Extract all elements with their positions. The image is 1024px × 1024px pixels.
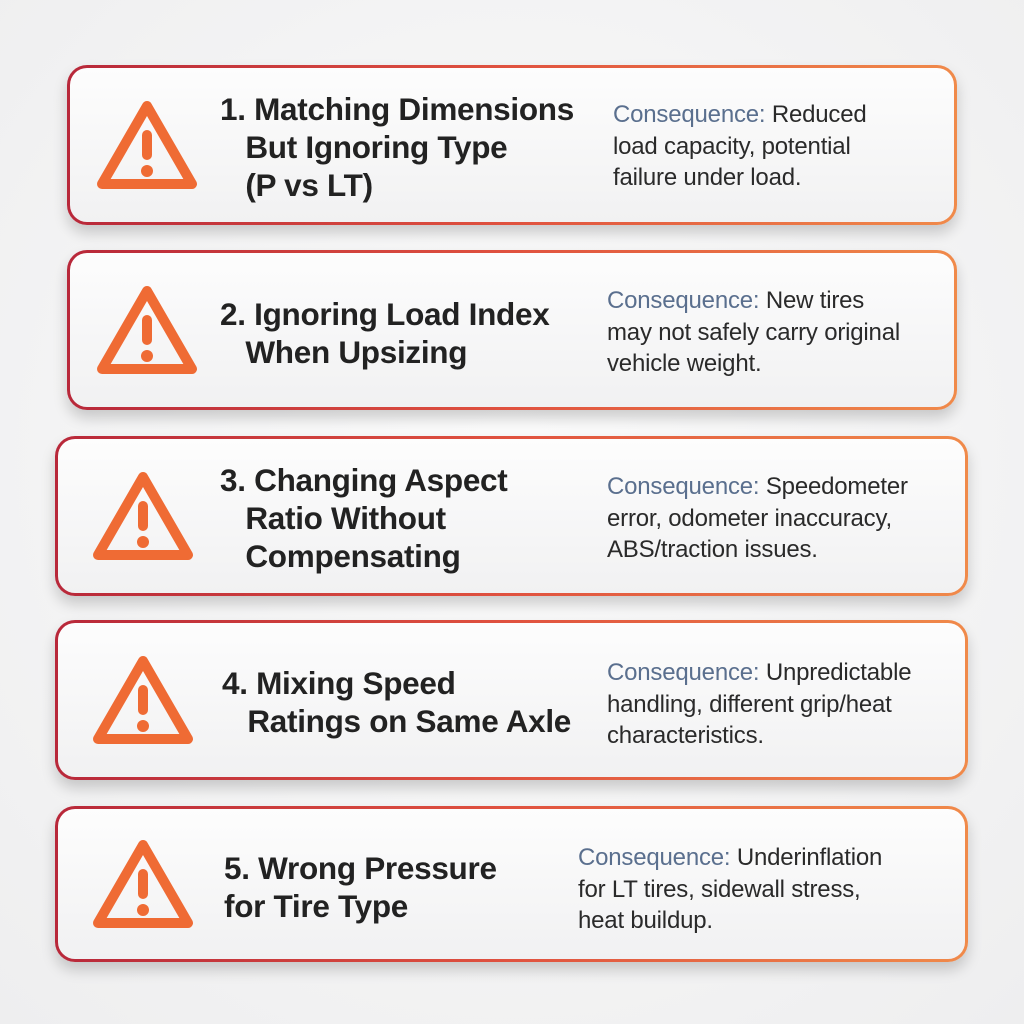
consequence [607, 659, 911, 749]
icon: warning [97, 101, 197, 189]
title: When Upsizing [245, 334, 467, 370]
consequence: characteristics. [607, 722, 764, 749]
consequence [607, 473, 908, 563]
title: 3. Changing Aspect [220, 462, 507, 498]
title [220, 296, 550, 370]
consequence: Consequence: Speedometer [607, 473, 908, 500]
title: 5. Wrong Pressure [224, 850, 497, 886]
card 5 [55, 806, 968, 962]
title: for Tire Type [224, 888, 408, 924]
title: 1. Matching Dimensions [220, 91, 574, 127]
consequence: vehicle weight. [607, 350, 761, 377]
consequence: may not safely carry original [607, 318, 900, 346]
consequence: load capacity, potential [613, 132, 851, 160]
icon: warning [93, 840, 193, 928]
consequence: Consequence: Unpredictable [607, 659, 911, 686]
consequence: handling, different grip/heat [607, 690, 892, 718]
title: (P vs LT) [245, 167, 373, 203]
icon: warning [97, 286, 197, 374]
consequence: ABS/traction issues. [607, 536, 818, 563]
card 3 [55, 436, 968, 596]
consequence [607, 287, 900, 377]
consequence: failure under load. [613, 164, 801, 191]
title: Compensating [245, 538, 461, 574]
title: Ratings on Same Axle [247, 703, 571, 739]
icon: warning [93, 656, 193, 744]
title [224, 850, 497, 924]
card 1 [67, 65, 957, 225]
title [220, 462, 508, 574]
title [220, 91, 574, 203]
title [222, 665, 571, 739]
consequence: Consequence: Reduced [613, 101, 867, 128]
title: But Ignoring Type [245, 129, 507, 165]
card 4 [55, 620, 968, 780]
consequence: error, odometer inaccuracy, [607, 504, 892, 532]
consequence: heat buildup. [578, 907, 713, 934]
title: Ratio Without [245, 500, 446, 536]
title: 4. Mixing Speed [222, 665, 456, 701]
title: 2. Ignoring Load Index [220, 296, 549, 332]
consequence [578, 844, 882, 934]
consequence: for LT tires, sidewall stress, [578, 876, 861, 902]
consequence: Consequence: Underinflation [578, 844, 882, 871]
card 2 [67, 250, 957, 410]
consequence [613, 101, 867, 191]
icon: warning [93, 472, 193, 560]
consequence: Consequence: New tires [607, 287, 864, 314]
